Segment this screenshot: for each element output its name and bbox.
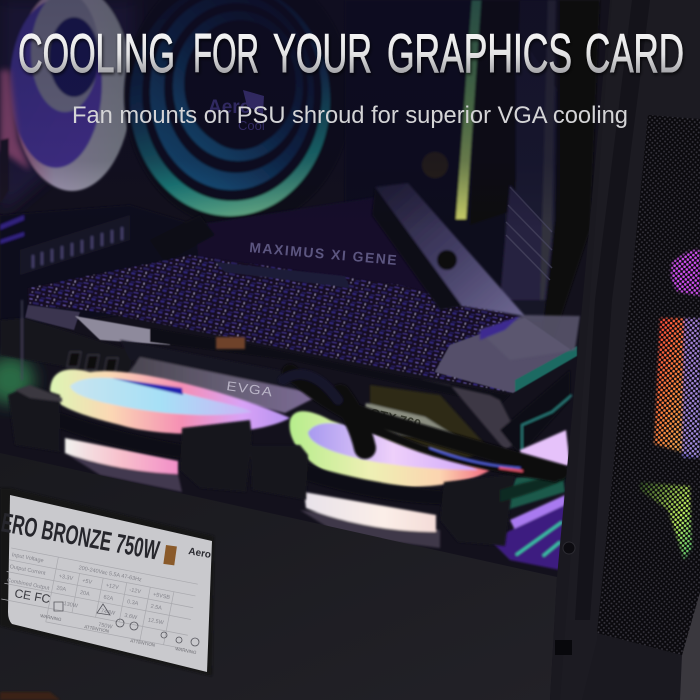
vga heatsink stripes on motherboard	[506, 187, 552, 280]
heat pipes	[216, 337, 245, 349]
graphics card pcb	[25, 255, 577, 405]
evga logo: EVGA	[226, 378, 274, 400]
spec table: 12.5W	[147, 617, 165, 626]
spec table: 130W	[63, 601, 79, 610]
spec table: 3.6W	[124, 613, 138, 621]
power cables	[283, 372, 560, 478]
spec table: 2.5A	[150, 604, 163, 612]
cooler hub logo: Aero	[208, 97, 251, 118]
psu recess edge	[0, 488, 214, 676]
spec table: 0.3A	[126, 599, 139, 607]
gpu bracket and vents	[0, 300, 320, 413]
subtitle: Fan mounts on PSU shroud for superior VGA cooling	[72, 102, 628, 129]
spec table	[0, 548, 198, 649]
spec table: +5VSB	[152, 592, 171, 601]
spec table: +12V	[105, 583, 119, 591]
cpu cooler fan	[124, 0, 352, 228]
spec table: 20A	[79, 590, 90, 598]
gtx 760 text: GTX 760	[368, 405, 422, 432]
safety icons	[54, 602, 199, 646]
fan 1	[50, 369, 290, 492]
fan frame arms	[8, 385, 565, 546]
bronze badge	[163, 545, 177, 565]
brand text: Aero	[187, 546, 212, 561]
motherboard label: MAXIMUS XI GENE	[249, 239, 399, 268]
spec table: Input Voltage	[11, 552, 44, 564]
psu shroud	[0, 453, 557, 700]
spec table: 200-240Vac 5.5A 47-63Hz	[78, 565, 142, 583]
right motherboard area and ram	[345, 0, 600, 350]
right case frame	[550, 0, 700, 700]
gpu shroud gtx	[362, 370, 572, 460]
title	[18, 22, 684, 84]
fan 2	[289, 411, 570, 570]
title: YOUR	[273, 22, 372, 84]
warning text: WARNING	[40, 613, 62, 622]
cooler hub logo: Cool	[238, 118, 265, 133]
psu model text: ERO BRONZE 750W	[0, 507, 162, 566]
mesh hole overlay	[597, 115, 700, 655]
floor tint	[0, 692, 60, 700]
certification marks: CE FC	[13, 586, 52, 606]
warning text: ATTENTION	[130, 638, 155, 648]
spec table: -12V	[129, 587, 142, 595]
mesh rgb lights	[640, 250, 700, 560]
warning text: ATTENTION	[84, 624, 109, 634]
warning text: WARNING	[175, 646, 197, 655]
psu label	[0, 495, 212, 672]
diagonal motherboard bracket	[372, 183, 580, 360]
spec table: 62A	[103, 594, 114, 602]
mesh front panel	[597, 115, 700, 655]
spec table: +5V	[82, 578, 93, 586]
dark header overlay	[0, 0, 560, 230]
title: GRAPHICS	[387, 22, 572, 84]
spec table: 20A	[56, 585, 67, 593]
green side glow	[0, 356, 34, 404]
left top rgb fan	[0, 0, 135, 215]
motherboard upper slot	[0, 195, 510, 330]
spec table: Combined Output	[6, 578, 50, 592]
spec table: +3.3V	[58, 574, 74, 582]
spec table: Output Current	[9, 564, 46, 577]
spec table: 750W	[98, 622, 114, 631]
spec table: 744W	[100, 608, 116, 617]
cooler hub logo	[208, 90, 265, 133]
warning text	[40, 613, 197, 655]
title: FOR	[193, 22, 259, 84]
title: COOLING	[18, 22, 175, 84]
